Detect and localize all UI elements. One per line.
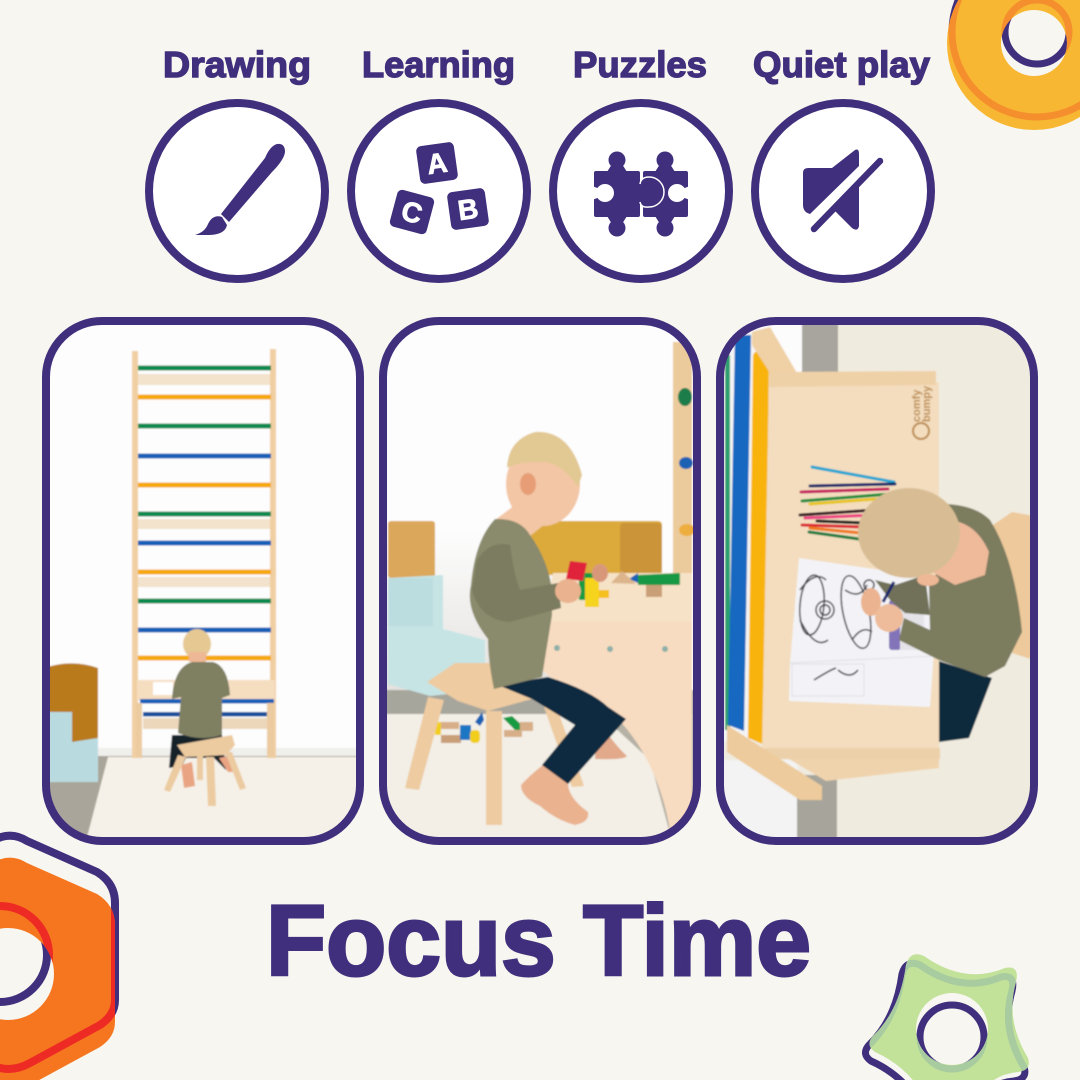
icon: alphabet blocks [351, 103, 527, 279]
stool [164, 735, 246, 806]
desk [137, 680, 275, 700]
logo: comfy [911, 389, 923, 422]
ladder rails [132, 351, 138, 758]
stool [405, 663, 584, 825]
hair [858, 488, 960, 578]
label: Learning: Learning [362, 44, 515, 85]
foam cushions [46, 711, 98, 782]
icon: muted speaker [755, 103, 931, 279]
other foot [595, 737, 627, 759]
rails [724, 381, 754, 741]
icon: paint brush [149, 103, 325, 279]
shirt [899, 504, 1022, 677]
mustard cushions [527, 521, 662, 575]
label: Puzzles: Puzzles [573, 44, 707, 85]
icon: alphabet blocks: A [425, 147, 449, 180]
hands [861, 588, 881, 616]
pants [498, 677, 626, 784]
blue foam [388, 575, 485, 696]
colored pencils [800, 467, 895, 539]
decorative green gear, bottom right [865, 954, 1029, 1080]
planks [138, 374, 270, 385]
car drawings [798, 574, 876, 682]
icon: alphabet blocks: B [456, 193, 480, 226]
panel: photo of child playing with blocks at table [383, 321, 697, 844]
title: Focus Time [266, 885, 811, 997]
floor and rug [383, 690, 697, 716]
table [543, 573, 692, 624]
shirt [470, 519, 552, 689]
blocks on floor [435, 712, 533, 743]
coloring sheets [789, 558, 935, 707]
blocks on table [638, 573, 680, 585]
neck [932, 520, 989, 585]
boy head [505, 461, 581, 527]
floor [50, 755, 356, 835]
desk [762, 382, 939, 750]
logo: bumpy [921, 385, 933, 422]
child [169, 735, 226, 770]
label: Drawing: Drawing [163, 44, 311, 85]
decorative orange hexagon, bottom left [0, 836, 115, 1080]
rungs [138, 366, 271, 370]
logo [911, 385, 933, 439]
hand [555, 579, 581, 603]
stool [992, 512, 1030, 660]
decorative yellow ring, top right [947, 0, 1080, 130]
wood post [673, 342, 692, 574]
lower wedge [727, 725, 822, 800]
upper wedge [752, 327, 797, 373]
panel: overhead photo of child colouring at desk [720, 321, 1034, 845]
icon: puzzle pieces [553, 103, 729, 279]
pants [939, 661, 992, 742]
bare foot [521, 765, 588, 825]
icon: alphabet blocks: C [398, 195, 426, 230]
panel: photo of child at wall ladder desk [46, 321, 360, 846]
label: Quiet play: Quiet play [753, 44, 930, 85]
rug [86, 757, 360, 841]
